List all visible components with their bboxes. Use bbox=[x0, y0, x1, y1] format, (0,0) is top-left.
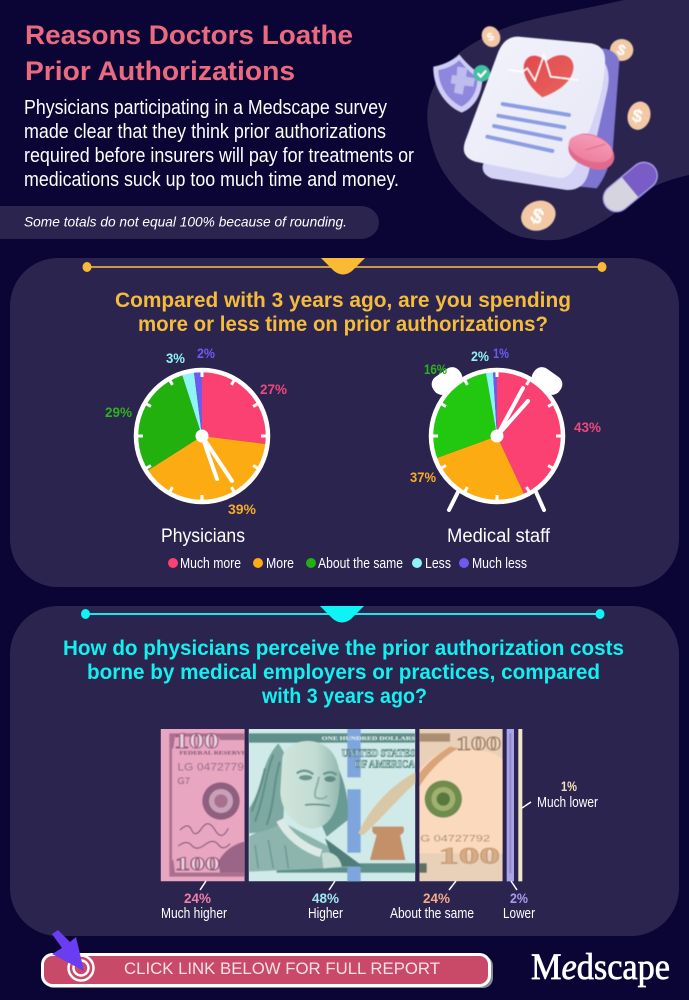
legend: Much less bbox=[472, 556, 527, 572]
bill segment: lower bbox=[507, 729, 514, 881]
icon: coin top right bbox=[610, 39, 633, 61]
intro text block: medications suck up too much time and money. bbox=[24, 169, 399, 191]
header blob bbox=[427, 0, 689, 240]
section marker: gold line bbox=[82, 258, 606, 274]
label: much lower bbox=[522, 778, 598, 811]
bill segment: much higher: FEDERAL RESERVE NOTE bbox=[179, 750, 268, 756]
chart: physicians clock pie: Physicians bbox=[161, 526, 245, 547]
heading: time question: Compared with 3 years ago, are you spending bbox=[115, 288, 571, 312]
intro text block: Physicians participating in a Medscape survey bbox=[24, 97, 387, 119]
chart: medical staff alarm clock pie: Medical staff bbox=[447, 526, 551, 547]
intro text block: made clear that they think prior authorizations bbox=[24, 121, 386, 143]
chart: physicians clock pie: 29% bbox=[105, 404, 133, 420]
chart: medical staff alarm clock pie bbox=[410, 345, 602, 547]
icon: coin top left bbox=[478, 23, 504, 50]
rounding note: Some totals do not equal 100% because of rounding. bbox=[24, 214, 347, 230]
label: higher: 48% bbox=[312, 890, 340, 906]
panel: perceived costs bbox=[10, 606, 679, 936]
logo: Medscape: Medscape bbox=[531, 947, 670, 988]
bill segment: about the same: 100 bbox=[456, 733, 501, 755]
legend: Much more bbox=[180, 556, 241, 572]
icon: heart with pulse bbox=[508, 55, 578, 97]
label: much higher: Much higher bbox=[161, 906, 227, 922]
button: full report link: CLICK LINK BELOW FOR FULL REPORT bbox=[124, 960, 440, 978]
icon: purple arrow bbox=[52, 930, 84, 971]
legend: About the same bbox=[318, 556, 403, 572]
illustration: medical paperwork bbox=[433, 23, 657, 236]
bill segment: much higher: 100 bbox=[174, 728, 219, 753]
heading: cost question bbox=[63, 636, 624, 708]
section marker: cyan line bbox=[81, 606, 604, 622]
chart: physicians clock pie: 27% bbox=[260, 381, 288, 397]
legend: More bbox=[266, 556, 294, 572]
bill segment: about the same: 100 bbox=[438, 843, 500, 869]
chart: medical staff alarm clock pie: 37% bbox=[410, 469, 437, 485]
chart: medical staff alarm clock pie: 2% bbox=[471, 348, 489, 364]
label: about the same: About the same bbox=[390, 906, 474, 922]
chart: physicians clock pie bbox=[105, 345, 288, 547]
icon: click target bbox=[68, 956, 94, 980]
title: Reasons Doctors Loathe bbox=[25, 20, 353, 50]
heading: cost question: with 3 years ago? bbox=[261, 684, 427, 708]
label: much lower: Much lower bbox=[537, 795, 598, 811]
heading: time question bbox=[115, 288, 571, 336]
chart: medical staff alarm clock pie: 43% bbox=[574, 419, 602, 435]
panel: time spent on prior authorizations bbox=[10, 258, 679, 587]
chart: physicians clock pie: 39% bbox=[228, 501, 257, 517]
icon: coin top left: $ bbox=[485, 31, 497, 44]
icon: round pill bbox=[565, 129, 616, 170]
bill segment: higher, portrait bbox=[249, 727, 417, 883]
intro text block: required before insurers will pay for treatments or bbox=[24, 145, 414, 167]
intro text block bbox=[24, 97, 414, 191]
icon: coin top right: $ bbox=[614, 42, 628, 60]
title: Prior Authorizations bbox=[25, 56, 295, 86]
bill segment: higher, portrait: UNITED STATES bbox=[342, 749, 415, 760]
icon: coin bottom: $ bbox=[527, 203, 548, 230]
bill segment: about the same: LG 04727792 bbox=[413, 833, 490, 843]
label: much higher bbox=[161, 881, 227, 922]
icon: coin right bbox=[624, 99, 654, 132]
bill segment: much higher bbox=[160, 729, 245, 882]
icon: capsule bbox=[604, 163, 657, 211]
label: much lower: 1% bbox=[561, 778, 577, 794]
label: about the same bbox=[390, 881, 474, 922]
rounding note bbox=[0, 206, 379, 239]
label: higher: Higher bbox=[308, 906, 343, 922]
label: about the same: 24% bbox=[423, 890, 451, 906]
chart: physicians clock pie: 2% bbox=[197, 345, 215, 361]
heading: cost question: borne by medical employers or practices, compared bbox=[87, 660, 600, 684]
label: lower bbox=[503, 881, 535, 922]
heading: cost question: How do physicians perceive the prior authorization costs bbox=[63, 636, 624, 660]
chart: medical staff alarm clock pie: 1% bbox=[493, 345, 509, 361]
icon: document stack bbox=[464, 37, 619, 190]
icon: coin right: $ bbox=[630, 105, 645, 127]
chart: 100 dollar bill split by share bbox=[161, 727, 522, 883]
legend bbox=[168, 556, 527, 572]
bill segment: about the same bbox=[413, 729, 503, 881]
legend: Less bbox=[425, 556, 451, 572]
icon: coin bottom bbox=[516, 195, 560, 236]
bill segment: higher, portrait: OF AMERICA bbox=[354, 759, 416, 770]
bill segment: much higher: LG 0472779 bbox=[177, 762, 244, 774]
title bbox=[25, 20, 353, 86]
bill segment: higher, portrait: ONE HUNDRED DOLLARS bbox=[322, 736, 415, 742]
label: lower: 2% bbox=[510, 890, 528, 906]
label: much higher: 24% bbox=[184, 890, 212, 906]
label: higher bbox=[308, 881, 343, 922]
chart: physicians clock pie: 3% bbox=[166, 350, 186, 366]
bill segment: much higher: G7 bbox=[177, 776, 190, 786]
chart: medical staff alarm clock pie: 16% bbox=[424, 361, 447, 377]
bill segment: much higher: 100 bbox=[175, 854, 220, 875]
button: full report link bbox=[42, 930, 493, 988]
bill segment: much lower bbox=[518, 729, 522, 881]
label: lower: Lower bbox=[503, 906, 535, 922]
icon: shield with check bbox=[433, 54, 490, 113]
document text lines bbox=[487, 104, 569, 151]
heading: time question: more or less time on prior authorizations? bbox=[138, 312, 548, 336]
